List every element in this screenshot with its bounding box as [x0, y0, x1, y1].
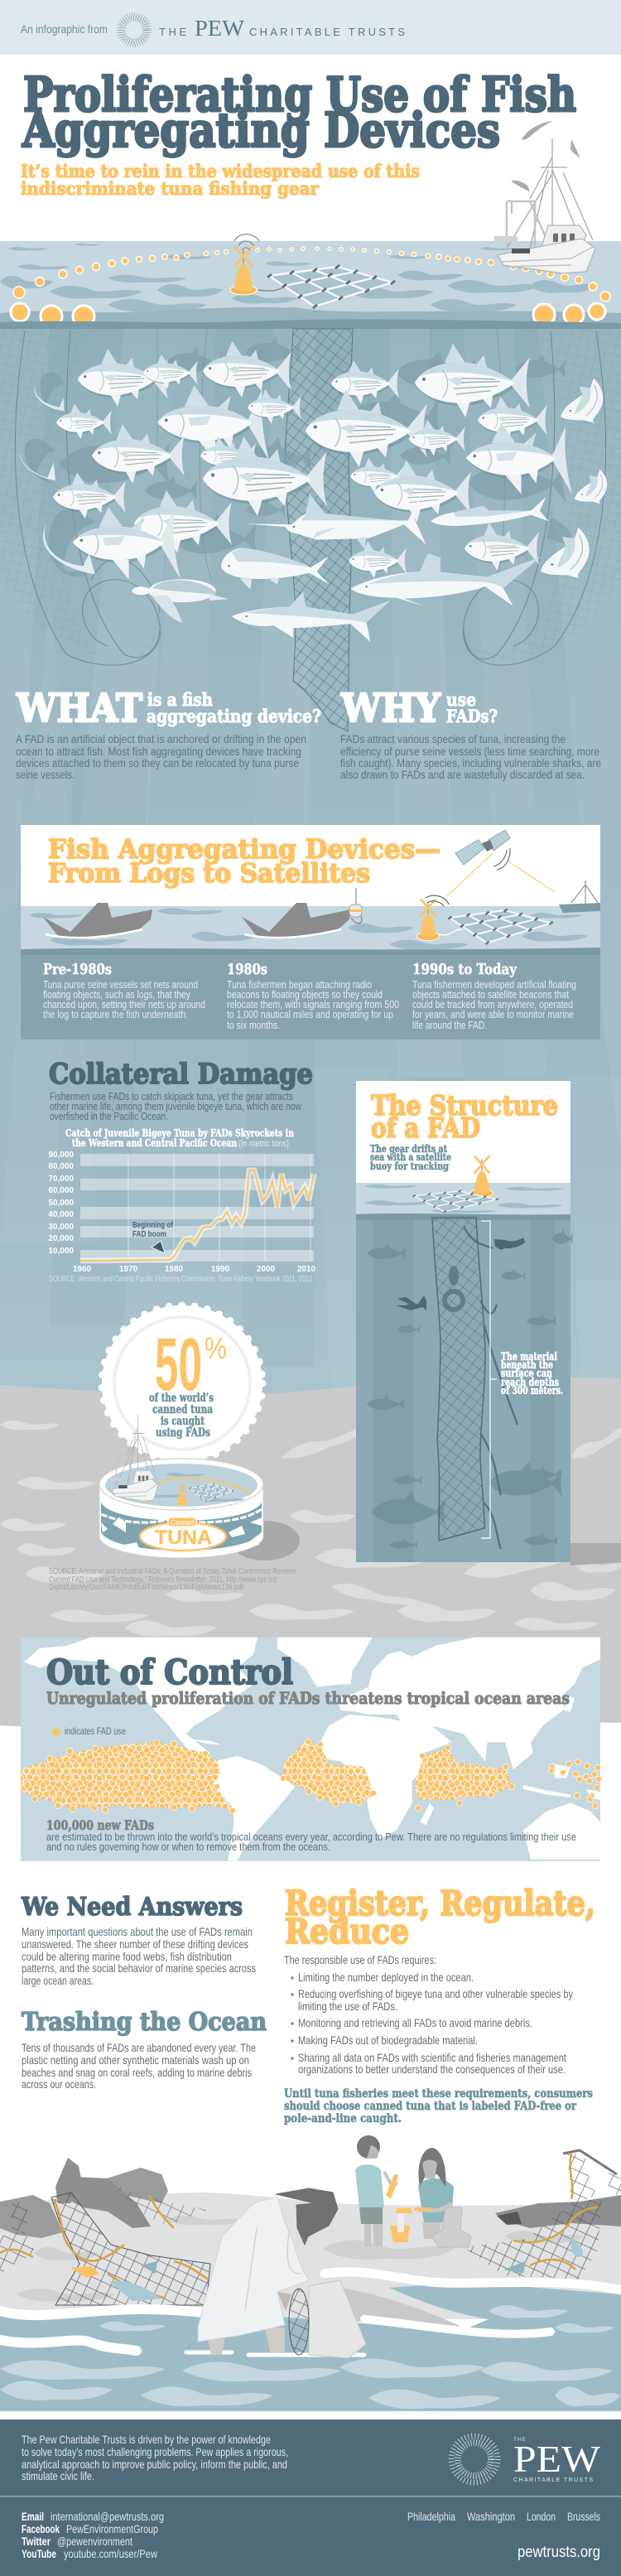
- icon: log with radio beacon: [242, 888, 362, 938]
- figure: woman collecting net: [198, 2188, 366, 2358]
- beach scene illustration: [0, 2135, 621, 2411]
- can label: TUNA: [155, 1527, 212, 1549]
- annotation: beginning of FAD boom: [132, 1220, 173, 1253]
- we need answers: large ocean areas.: [22, 1974, 94, 1987]
- tuna can with 50 percent callout: [99, 1305, 300, 1561]
- column: 1990s to today: objects attached to satellite beacons that: [412, 989, 569, 1001]
- can source note: SOURCE: Artisanal and Industrial FADs: A Question of Scale, Tahiti Conference Reviews: [49, 1567, 296, 1576]
- statistic caption: is caught: [161, 1415, 205, 1428]
- icon: sea turtle: [132, 579, 229, 623]
- offices: Brussels: [567, 2510, 600, 2523]
- we need answers: patterns, and the social behavior of marine species across: [22, 1961, 256, 1975]
- we need answers: could be altering marine food webs, fish distribution: [22, 1950, 232, 1963]
- statistic caption: canned tuna: [152, 1403, 213, 1416]
- contact list: youtube.com/user/Pew: [64, 2547, 158, 2560]
- debris nets left: [0, 2178, 210, 2305]
- column: 1990s to today: 1990s to Today: [412, 961, 517, 978]
- water: [0, 2272, 621, 2411]
- header band: PEW: [195, 16, 245, 41]
- figure: boy with shovel: [355, 2135, 398, 2246]
- can source note: DigitalLibrary/Doc/FAME/InfoBull/FishNews/136/FishNews136.pdf: [49, 1583, 243, 1592]
- line chart: catch of juvenile bigeye tuna: 10,000: [48, 1247, 74, 1256]
- right driftwood and net: [464, 2150, 621, 2279]
- line chart: catch of juvenile bigeye tuna: Catch of Juvenile Bigeye Tuna by FADs Skyrockets in: [65, 1126, 294, 1139]
- what text: A FAD is an artificial object that is anchored or drifting in the open: [16, 732, 306, 745]
- icon: marlin: [244, 493, 426, 549]
- why heading: FADs?: [446, 706, 498, 726]
- contact list: international@pewtrusts.org: [51, 2510, 164, 2523]
- depth callout: The material: [501, 1351, 557, 1363]
- statistic: 50 percent: %: [205, 1331, 227, 1365]
- what text: [16, 732, 306, 781]
- collateral damage text: other marine life, among them juvenile bigeye tuna, which are now: [50, 1100, 301, 1112]
- subheading: sea with a satellite: [370, 1151, 451, 1163]
- depth callout: reach depths: [501, 1377, 559, 1389]
- register regulate reduce: [284, 1884, 595, 2125]
- contact list: [22, 2510, 164, 2560]
- stat callout: 100,000 new FADs: 100,000 new FADs: [46, 1817, 154, 1833]
- website: pewtrusts.org: [518, 2544, 600, 2561]
- column: 1990s to today: life around the FAD.: [412, 1020, 487, 1031]
- line chart: catch of juvenile bigeye tuna: 1990: [211, 1265, 230, 1274]
- what heading: WHAT: [16, 686, 142, 731]
- column: pre-1980s: Tuna purse seine vessels set nets around: [43, 979, 198, 991]
- subtitle: [21, 161, 420, 199]
- trashing the ocean: Tens of thousands of FADs are abandoned every year. The: [22, 2041, 256, 2054]
- line chart: catch of juvenile bigeye tuna: 2000: [257, 1265, 276, 1274]
- heading: Fish Aggregating Devices—: [48, 833, 440, 865]
- school of tuna: [53, 341, 572, 579]
- about text: [22, 2433, 288, 2482]
- what text: devices attached to them so they can be relocated by tuna purse: [16, 756, 299, 769]
- trashing the ocean: plastic netting and other synthetic materials wash up on: [22, 2053, 249, 2067]
- contact list: Facebook: [22, 2522, 60, 2535]
- what heading: [16, 686, 321, 731]
- icon: pew sunburst logo: [118, 14, 150, 46]
- line chart: catch of juvenile bigeye tuna: 1980: [165, 1265, 184, 1274]
- line chart: catch of juvenile bigeye tuna: the Western and Central Pacific Ocean: [72, 1136, 237, 1149]
- requirements list: Monitoring and retrieving all FADs to avoid marine debris.: [298, 2016, 532, 2029]
- statistic caption: [149, 1392, 214, 1440]
- can label: Canned: [171, 1518, 195, 1527]
- column: 1990s to today: [412, 961, 576, 1031]
- subtitle: indiscriminate tuna fishing gear: [21, 178, 320, 199]
- purse seine side nets: [0, 329, 621, 665]
- waves: [0, 244, 596, 321]
- subtitle: It’s time to rein in the widespread use of this: [21, 161, 420, 181]
- requirements list: Limiting the number deployed in the ocean.: [298, 1971, 474, 1984]
- icon: fishing boat: [494, 138, 595, 273]
- icon: FAD raft: [267, 265, 395, 308]
- icon: oceanic whitetip shark: [350, 553, 541, 606]
- trashing the ocean: [22, 2008, 267, 2091]
- trashing the ocean: across our oceans.: [22, 2077, 96, 2091]
- requirements list: limiting the use of FADs.: [298, 2000, 397, 2013]
- collateral damage text: [50, 1090, 301, 1122]
- line chart: catch of juvenile bigeye tuna: 20,000: [48, 1234, 74, 1243]
- icon: mahi-mahi: [221, 548, 329, 590]
- world map land: [24, 1638, 600, 1861]
- icon: floating log: [43, 903, 152, 938]
- panel: out of control map: [21, 1638, 602, 1861]
- statistic caption: of the world’s: [149, 1392, 214, 1405]
- icon: buoy with radio signal: [230, 234, 286, 295]
- pew logo: [451, 2436, 601, 2483]
- can source note: Current FAD Use and Technology,” Fisheries Newsletter, 2011, http://www.spc.int/: [49, 1575, 277, 1585]
- register regulate reduce: Reduce: [285, 1912, 409, 1951]
- collateral damage text: Fishermen use FADs to catch skipjack tuna, yet the gear attracts: [50, 1090, 293, 1102]
- contact list: Email: [22, 2510, 44, 2523]
- underwater background with light rays: [0, 327, 621, 1408]
- collateral damage heading: Collateral Damage: [49, 1058, 313, 1091]
- why heading: [340, 686, 498, 731]
- depth callout: of 300 meters.: [501, 1385, 563, 1397]
- FAD distribution dots: [21, 1739, 602, 1814]
- icon: silver curved fish: [20, 379, 607, 578]
- pew logo: CHARITABLE TRUSTS: [513, 2477, 593, 2483]
- we need answers: Many important questions about the use of FADs remain: [22, 1925, 253, 1938]
- icon: sandcastle: [431, 2207, 471, 2247]
- header band: [0, 0, 621, 55]
- sand: [0, 2192, 621, 2319]
- figure: girl building sandcastle: [390, 2148, 471, 2247]
- column: 1990s to today: could be tracked from anywhere, operated: [412, 999, 573, 1011]
- icon: satellite with signal: [447, 830, 555, 896]
- line chart: catch of juvenile bigeye tuna: 1960: [73, 1265, 92, 1274]
- what heading: is a fish: [147, 689, 213, 710]
- column: pre-1980s: floating objects, such as logs, that they: [43, 989, 191, 1001]
- column: 1980s: Tuna fishermen began attaching radio: [227, 979, 372, 991]
- line chart: catch of juvenile bigeye tuna: 70,000: [48, 1175, 74, 1184]
- heading: Out of Control: [46, 1652, 293, 1692]
- panel: logs to satellites: [21, 825, 600, 1040]
- column: pre-1980s: chanced upon, setting their nets up around: [43, 999, 205, 1011]
- large pelagic fish, sharks and turtle: [20, 379, 607, 642]
- what text: ocean to attract fish. Most fish aggregating devices have tracking: [16, 745, 301, 758]
- stat callout: 100,000 new FADs: and no rules governing how or when to remove them from the oceans.: [46, 1840, 330, 1853]
- annotation: beginning of FAD boom: Beginning of: [132, 1220, 173, 1230]
- offices: Philadelphia: [407, 2510, 455, 2523]
- heading: of a FAD: [371, 1112, 480, 1144]
- line chart: catch of juvenile bigeye tuna: 90,000: [48, 1151, 74, 1160]
- subheading: The gear drifts at: [370, 1143, 447, 1155]
- can source note: [49, 1567, 296, 1592]
- icon: orange bucket: [390, 2226, 410, 2242]
- floats: [13, 247, 610, 301]
- we need answers: We Need Answers: [21, 1893, 243, 1922]
- why heading: use: [446, 689, 476, 710]
- icon: buoy and raft: [413, 1155, 498, 1213]
- line chart: catch of juvenile bigeye tuna: 50,000: [48, 1199, 74, 1208]
- depth bracket: [481, 1221, 497, 1538]
- column: 1980s: [227, 961, 399, 1031]
- heading: From Logs to Satellites: [48, 857, 370, 889]
- footer: [0, 2419, 621, 2576]
- contact list: Twitter: [22, 2535, 51, 2548]
- trashing the ocean: Trashing the Ocean: [22, 2008, 267, 2037]
- line chart: catch of juvenile bigeye tuna: 1970: [119, 1265, 138, 1274]
- statistic caption: using FADs: [156, 1426, 210, 1440]
- line chart: catch of juvenile bigeye tuna: 30,000: [48, 1223, 74, 1232]
- column: 1980s: to six months.: [227, 1020, 280, 1031]
- contact list: PewEnvironmentGroup: [66, 2522, 158, 2535]
- heading: [371, 1089, 558, 1144]
- requirements list: [291, 1971, 573, 2076]
- statistic: 50 percent: 50: [155, 1324, 202, 1406]
- consumer advice: [284, 2087, 593, 2125]
- icon: fad netting: [432, 1218, 518, 1549]
- legend: [52, 1725, 126, 1737]
- why heading: WHY: [340, 686, 440, 731]
- fish shadows: [25, 336, 575, 576]
- collateral damage text: overfished in the Pacific Ocean.: [50, 1110, 168, 1122]
- line chart: catch of juvenile bigeye tuna: 2010: [297, 1265, 316, 1274]
- line chart: catch of juvenile bigeye tuna: [48, 1126, 316, 1284]
- header band: THE: [159, 26, 186, 38]
- contact list: @pewenvironment: [57, 2535, 132, 2548]
- header band: An infographic from: [21, 22, 108, 36]
- about text: The Pew Charitable Trusts is driven by the power of knowledge: [22, 2433, 271, 2446]
- why text: also drawn to FADs and are wastefully discarded at sea.: [340, 768, 585, 781]
- about text: stimulate civic life.: [22, 2469, 94, 2482]
- icon: scuba divers: [396, 1237, 525, 1310]
- why text: FADs attract various species of tuna, increasing the: [340, 732, 566, 745]
- can body: [99, 1415, 263, 1558]
- stat callout: 100,000 new FADs: [46, 1817, 576, 1853]
- requirements list: Making FADs out of biodegradable material.: [298, 2033, 478, 2047]
- line chart: catch of juvenile bigeye tuna: SOURCE: Western and Central Pacific Fisheries Commission, Tuna Fishery Yearbook 2011, 2012.: [49, 1275, 314, 1284]
- register regulate reduce: The responsible use of FADs requires:: [284, 1953, 436, 1966]
- depth callout: surface can: [501, 1368, 552, 1380]
- column: 1980s: to 1,000 nautical miles and operating for up: [227, 1009, 393, 1020]
- column: 1980s: relocate them, with signals ranging from 500: [227, 999, 399, 1011]
- sea floor: [0, 1377, 621, 1736]
- we need answers: unanswered. The sheer number of these drifting devices: [22, 1937, 248, 1951]
- heading: [48, 833, 440, 889]
- column: pre-1980s: the log to capture the fish underneath.: [43, 1009, 188, 1020]
- what heading: aggregating device?: [147, 706, 321, 726]
- rocks: [0, 2158, 168, 2238]
- consumer advice: pole-and-line caught.: [284, 2112, 402, 2125]
- column: pre-1980s: [43, 961, 205, 1020]
- legend: indicates FAD use: [65, 1725, 126, 1737]
- line chart: catch of juvenile bigeye tuna: 40,000: [48, 1210, 74, 1219]
- icon: satellite buoy and raft: [416, 895, 553, 944]
- offices: Washington: [467, 2510, 515, 2523]
- annotation: beginning of FAD boom: FAD boom: [132, 1229, 166, 1239]
- column: 1980s: 1980s: [227, 961, 267, 978]
- sea surface with floats, FAD and ship: [0, 121, 621, 329]
- about text: to solve today’s most challenging problems. Pew applies a rigorous,: [22, 2445, 288, 2458]
- icon: wahoo: [431, 497, 549, 526]
- depth callout: beneath the: [501, 1359, 553, 1372]
- offices: [407, 2510, 600, 2523]
- why text: [340, 732, 601, 781]
- column: 1990s to today: Tuna fishermen developed artificial floating: [412, 979, 576, 991]
- subheading: [370, 1143, 451, 1172]
- column: pre-1980s: Pre-1980s: [43, 961, 112, 978]
- icon: seagulls: [511, 121, 581, 192]
- offices: London: [527, 2510, 556, 2523]
- title: [22, 67, 576, 158]
- icon: silky shark: [232, 592, 390, 642]
- subheading: buoy for tracking: [370, 1160, 449, 1172]
- heading: The Structure: [371, 1089, 558, 1122]
- icon: sea life silhouettes: [367, 1229, 573, 1549]
- central FAD net: [285, 329, 353, 731]
- about text: analytical approach to improve public policy, inform the public, and: [22, 2458, 287, 2471]
- header band: CHARITABLE TRUSTS: [249, 26, 405, 38]
- column: 1990s to today: for years, and were able to monitor marine: [412, 1009, 574, 1020]
- we need answers: [21, 1893, 256, 1987]
- panel: structure of a FAD: [356, 1081, 573, 1562]
- icon: distant boat silhouette: [559, 880, 600, 913]
- contact list: YouTube: [22, 2547, 56, 2560]
- pew logo: THE: [513, 2437, 527, 2443]
- scalloped can lid: [102, 1305, 262, 1461]
- column: 1980s: beacons to floating objects so they could: [227, 989, 383, 1001]
- line chart: catch of juvenile bigeye tuna: 80,000: [48, 1162, 74, 1171]
- what text: seine vessels.: [16, 768, 75, 781]
- trashing the ocean: beaches and snag on coral reefs, adding to marine debris: [22, 2066, 252, 2079]
- title: Aggregating Devices: [22, 103, 500, 158]
- pew logo: PEW: [513, 2439, 601, 2480]
- line chart: catch of juvenile bigeye tuna: 60,000: [48, 1186, 74, 1195]
- depth callout: [501, 1351, 563, 1397]
- line chart: catch of juvenile bigeye tuna: (in metric tons): [238, 1139, 289, 1149]
- can label: [140, 1517, 226, 1551]
